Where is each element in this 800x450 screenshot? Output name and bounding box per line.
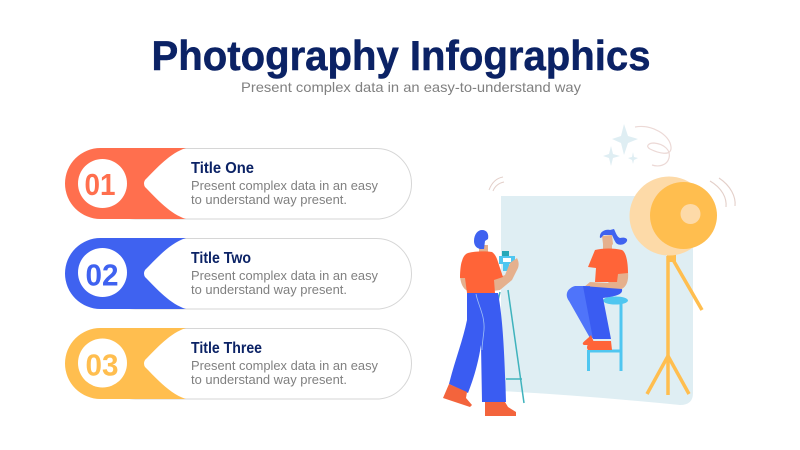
pill outline — [100, 328, 412, 399]
coloured tab — [65, 328, 186, 399]
hair — [474, 230, 488, 249]
pill outline — [100, 148, 412, 219]
tripod — [497, 290, 524, 403]
number badge — [78, 338, 127, 388]
title: Photography Infographics — [152, 32, 650, 79]
trousers — [449, 293, 506, 402]
stand bracket — [667, 254, 676, 262]
shoes — [583, 335, 612, 350]
camera — [499, 251, 515, 271]
number badge — [78, 159, 127, 208]
item heading: Title One — [191, 160, 254, 177]
item text: to understand way present. — [191, 193, 347, 207]
number badge: 03 — [86, 348, 118, 382]
item heading: Title Three — [191, 340, 262, 357]
number badge: 01 — [84, 167, 116, 202]
panel: item one — [65, 148, 411, 219]
item text — [191, 269, 379, 297]
backdrop — [501, 196, 693, 405]
item text — [191, 359, 379, 387]
pill outline — [100, 238, 412, 309]
item text — [191, 179, 379, 207]
face — [602, 235, 613, 246]
neck and arm — [584, 238, 628, 291]
stool seat — [603, 296, 628, 304]
coloured tab — [65, 238, 186, 309]
far leg — [567, 286, 596, 338]
coloured tab — [65, 148, 186, 219]
item text: Present complex data in an easy — [191, 359, 379, 373]
lamp light lines — [710, 178, 735, 207]
studio lamp — [630, 176, 717, 256]
illustration: photo studio — [443, 124, 735, 416]
item text: Present complex data in an easy — [191, 269, 379, 283]
near leg — [583, 286, 622, 339]
item text: Present complex data in an easy — [191, 179, 379, 193]
neck and left arm — [460, 245, 488, 291]
figure: photographer — [443, 230, 524, 416]
trouser seam — [476, 294, 484, 350]
subtitle: Present complex data in an easy-to-understand way — [241, 79, 581, 95]
stool — [588, 300, 621, 371]
hair — [600, 229, 627, 245]
item text: to understand way present. — [191, 283, 347, 297]
number badge: 02 — [86, 258, 118, 292]
torso — [588, 248, 628, 282]
shirt — [460, 251, 503, 293]
item heading: Title Two — [191, 250, 251, 267]
number badge — [78, 248, 127, 297]
shoes — [443, 384, 516, 416]
light stand — [647, 256, 702, 395]
item text: to understand way present. — [191, 373, 347, 387]
icon: sparkles — [603, 124, 638, 166]
panel: item three — [65, 328, 411, 399]
figure: seated woman — [567, 229, 628, 371]
left motion lines — [489, 177, 504, 191]
right arm — [493, 258, 519, 291]
panel: item two — [65, 238, 411, 309]
swirl line — [635, 127, 671, 166]
